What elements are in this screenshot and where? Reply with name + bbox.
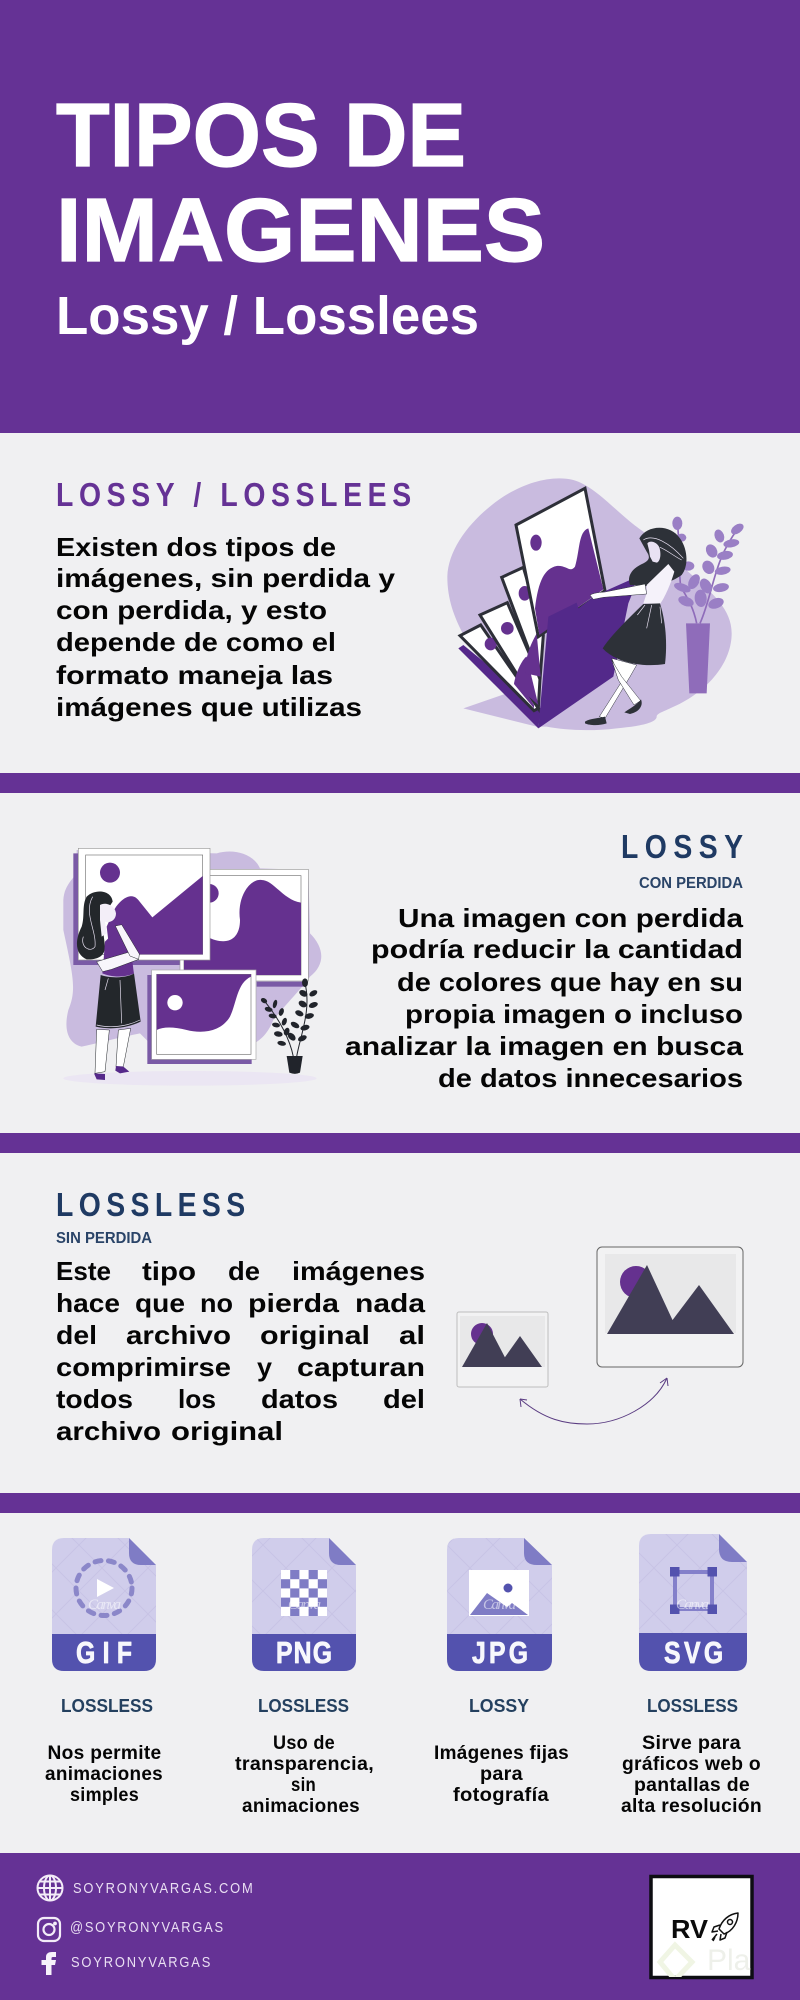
column 1: GIF caption: simples bbox=[70, 1785, 139, 1806]
file icon: SVG: SVG bbox=[664, 1635, 723, 1670]
icon: instagram bbox=[38, 1918, 60, 1941]
illustration: woman pulling image folder bbox=[447, 478, 746, 730]
panel: file formats bbox=[45, 1534, 762, 1817]
column 4: SVG caption: alta resolución bbox=[621, 1796, 762, 1817]
justified text block: original bbox=[171, 1416, 283, 1446]
column 1: GIF caption: Nos permite bbox=[48, 1743, 162, 1764]
justified text block: archivo bbox=[126, 1320, 231, 1350]
file icon: PNG: Canva bbox=[288, 1597, 321, 1613]
instagram handle: @SOYRONYVARGAS bbox=[70, 1918, 223, 1935]
subheading: SIN PERDIDA bbox=[56, 1230, 152, 1247]
divider band 3 bbox=[0, 1493, 800, 1513]
column 3: JPG caption: Imágenes fijas bbox=[434, 1743, 569, 1764]
panel: lossless bbox=[56, 1186, 743, 1446]
column 3: JPG caption: para bbox=[480, 1764, 523, 1785]
icon: facebook bbox=[42, 1952, 56, 1975]
heading: LOSSY bbox=[621, 828, 744, 866]
justified text block: pierda bbox=[248, 1288, 340, 1318]
file icon: JPG bbox=[447, 1538, 552, 1671]
column 1: GIF caption: LOSSLESS bbox=[61, 1696, 153, 1716]
justified text block: archivo bbox=[56, 1416, 161, 1446]
column 1: GIF caption: animaciones bbox=[45, 1764, 163, 1785]
lossy text block: analizar la imagen en busca bbox=[345, 1031, 744, 1061]
justified text block: no bbox=[200, 1288, 233, 1318]
justified text block bbox=[56, 1256, 426, 1446]
justified text block: capturan bbox=[297, 1352, 425, 1382]
panel: lossy / losslees intro bbox=[56, 476, 746, 730]
header panel bbox=[0, 0, 800, 433]
file icon: JPG: JPG bbox=[472, 1635, 528, 1670]
heading: LOSSY / LOSSLEES bbox=[56, 476, 411, 514]
column 3: JPG caption: LOSSY bbox=[469, 1696, 529, 1716]
title: IMAGENES bbox=[56, 181, 545, 281]
lossy text block: podría reducir la cantidad bbox=[371, 934, 743, 964]
justified text block: imágenes bbox=[292, 1256, 425, 1286]
heading: LOSSLESS bbox=[56, 1186, 245, 1224]
justified text block: los bbox=[178, 1384, 216, 1414]
column 4: SVG caption: Sirve para bbox=[642, 1733, 741, 1754]
column 2: PNG caption: sin bbox=[291, 1775, 316, 1796]
icon: large image card bbox=[597, 1247, 743, 1367]
column 4: SVG caption: gráficos web o bbox=[622, 1754, 761, 1775]
justified text block: de bbox=[228, 1256, 260, 1286]
column 2: PNG caption: transparencia, bbox=[235, 1754, 374, 1775]
column 2: PNG caption: animaciones bbox=[242, 1796, 360, 1817]
arrow: curved double arrow between cards bbox=[520, 1378, 668, 1424]
column 3: JPG caption: fotografía bbox=[453, 1785, 549, 1806]
file icon: PNG: PNG bbox=[276, 1635, 332, 1670]
intro text block: imágenes, sin perdida y bbox=[56, 563, 396, 593]
divider band 2 bbox=[0, 1133, 800, 1153]
justified text block: del bbox=[56, 1320, 97, 1350]
icon: globe bbox=[38, 1876, 62, 1900]
column 4: SVG caption bbox=[621, 1696, 762, 1817]
lossy text block: propia imagen o incluso bbox=[405, 999, 743, 1029]
subtitle: Lossy / Losslees bbox=[56, 286, 479, 346]
justified text block: original bbox=[260, 1320, 370, 1350]
lossy text block: Una imagen con perdida bbox=[398, 903, 744, 933]
file icon: GIF bbox=[52, 1538, 156, 1671]
lossy text block: de datos innecesarios bbox=[438, 1063, 743, 1093]
column 2: PNG caption: Uso de bbox=[273, 1733, 335, 1754]
divider band 1 bbox=[0, 773, 800, 793]
file icon: GIF: Canva bbox=[88, 1597, 121, 1613]
file icon: GIF: GIF bbox=[76, 1635, 132, 1670]
intro text block: imágenes que utilizas bbox=[56, 692, 362, 722]
title bbox=[56, 86, 545, 281]
title: TIPOS DE bbox=[56, 86, 466, 186]
justified text block: y bbox=[257, 1352, 273, 1382]
lossy text block: de colores que hay en su bbox=[397, 967, 743, 997]
intro text block: formato maneja las bbox=[56, 660, 333, 690]
panel: lossy bbox=[63, 828, 744, 1093]
justified text block: datos bbox=[261, 1384, 338, 1414]
column 4: SVG caption: LOSSLESS bbox=[647, 1696, 738, 1716]
intro text block bbox=[56, 532, 396, 722]
icon: small image card bbox=[457, 1312, 548, 1387]
icon: rocket bbox=[712, 1913, 738, 1941]
logo box: RV bbox=[671, 1914, 709, 1944]
lossy text block bbox=[345, 903, 744, 1093]
justified text block: tipo bbox=[142, 1256, 196, 1286]
justified text block: que bbox=[135, 1288, 185, 1318]
file icon: PNG bbox=[252, 1538, 356, 1671]
file icon: SVG bbox=[639, 1534, 747, 1671]
intro text block: Existen dos tipos de bbox=[56, 532, 336, 562]
column 1: GIF caption bbox=[45, 1696, 163, 1806]
logo box: Pla bbox=[707, 1944, 751, 1977]
justified text block: todos bbox=[56, 1384, 133, 1414]
illustration: woman looking at image frames bbox=[63, 848, 321, 1086]
logo box bbox=[651, 1876, 752, 1980]
column 4: SVG caption: pantallas de bbox=[634, 1775, 750, 1796]
column 2: PNG caption bbox=[235, 1696, 374, 1817]
file icon: SVG: Canva bbox=[676, 1597, 709, 1613]
file icon: JPG: Canva bbox=[483, 1597, 516, 1613]
intro text block: con perdida, y esto bbox=[56, 595, 327, 625]
column 2: PNG caption: LOSSLESS bbox=[258, 1696, 349, 1716]
justified text block: nada bbox=[355, 1288, 426, 1318]
intro text block: depende de como el bbox=[56, 627, 336, 657]
justified text block: al bbox=[399, 1320, 425, 1350]
justified text block: comprimirse bbox=[56, 1352, 231, 1382]
justified text block: hace bbox=[56, 1288, 120, 1318]
justified text block: Este bbox=[56, 1256, 111, 1286]
subheading: CON PERDIDA bbox=[639, 875, 743, 892]
website: SOYRONYVARGAS.COM bbox=[73, 1879, 253, 1896]
column 3: JPG caption bbox=[434, 1696, 569, 1806]
justified text block: del bbox=[383, 1384, 425, 1414]
footer panel bbox=[0, 1853, 800, 2000]
facebook handle: SOYRONYVARGAS bbox=[71, 1953, 210, 1970]
